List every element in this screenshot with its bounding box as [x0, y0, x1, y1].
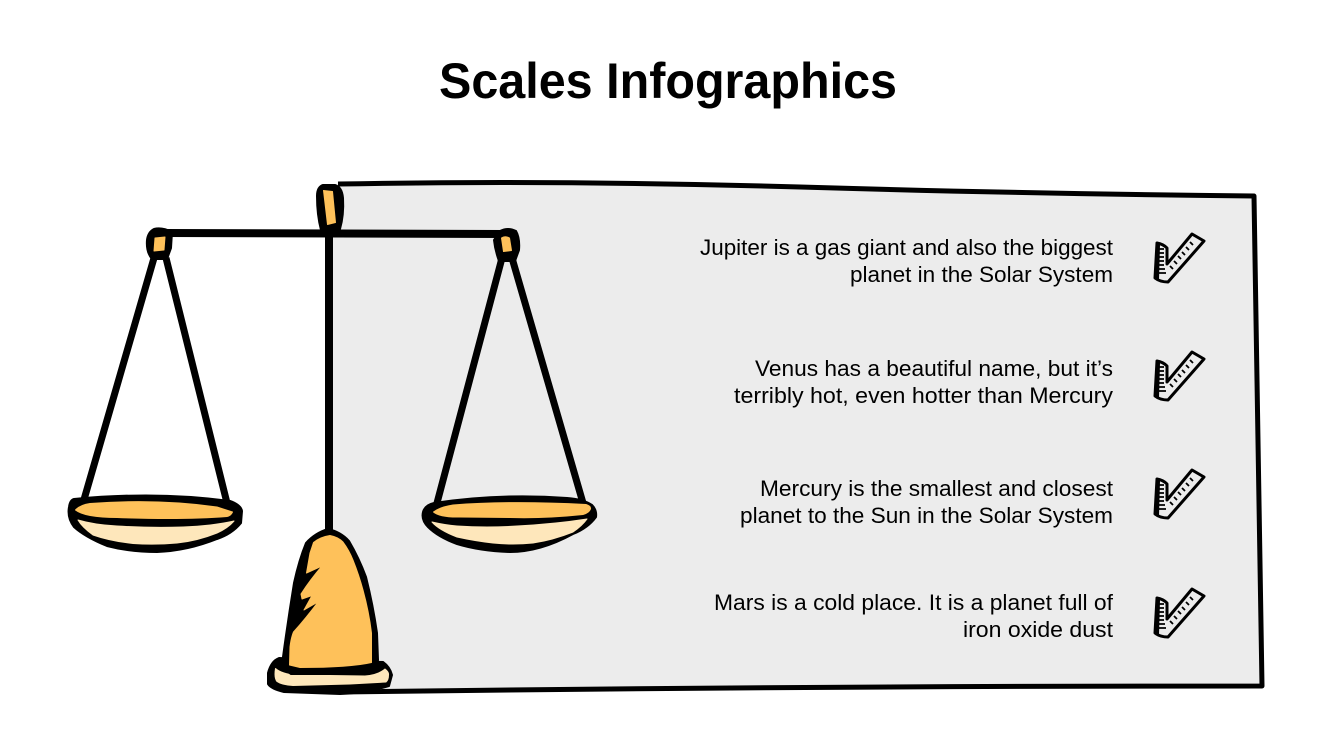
right pan assembly — [423, 229, 596, 552]
right knob — [494, 229, 519, 261]
text block: Venus: terribly hot, even hotter than Mercury — [734, 383, 1113, 408]
scale pole — [325, 230, 333, 535]
icon: check mark 3 — [1155, 470, 1204, 518]
text block: Jupiter: planet in the Solar System — [850, 262, 1113, 287]
text block: Mercury: Mercury is the smallest and closest — [760, 476, 1113, 501]
base plate — [268, 658, 392, 694]
panel: grey notes background — [333, 183, 1262, 692]
text block: Jupiter — [700, 235, 1113, 287]
text block: Venus — [734, 356, 1113, 408]
icon: check mark 2 — [1155, 352, 1204, 400]
title: Scales Infographics — [439, 53, 897, 109]
left knob — [147, 228, 172, 259]
left strings — [83, 258, 227, 503]
left pan — [69, 495, 242, 552]
base bell — [283, 529, 378, 674]
scale illustration — [69, 185, 596, 694]
text block: Mars: Mars is a cold place. It is a planet full of — [714, 590, 1114, 615]
right strings — [437, 258, 583, 503]
text block: Mars — [714, 590, 1114, 642]
center knob — [317, 185, 343, 230]
text block: Mercury — [740, 476, 1113, 528]
icon: check mark 4 — [1155, 589, 1204, 637]
text block: Jupiter: Jupiter is a gas giant and also the biggest — [700, 235, 1113, 260]
text block: Mars: iron oxide dust — [963, 617, 1113, 642]
icon: check mark 1 — [1155, 234, 1204, 282]
scale base — [268, 529, 392, 694]
scale beam — [165, 233, 505, 234]
text block: Venus: Venus has a beautiful name, but it’s — [755, 356, 1113, 381]
text block: Mercury: planet to the Sun in the Solar System — [740, 503, 1113, 528]
right pan — [423, 496, 596, 552]
left pan assembly — [69, 228, 242, 552]
